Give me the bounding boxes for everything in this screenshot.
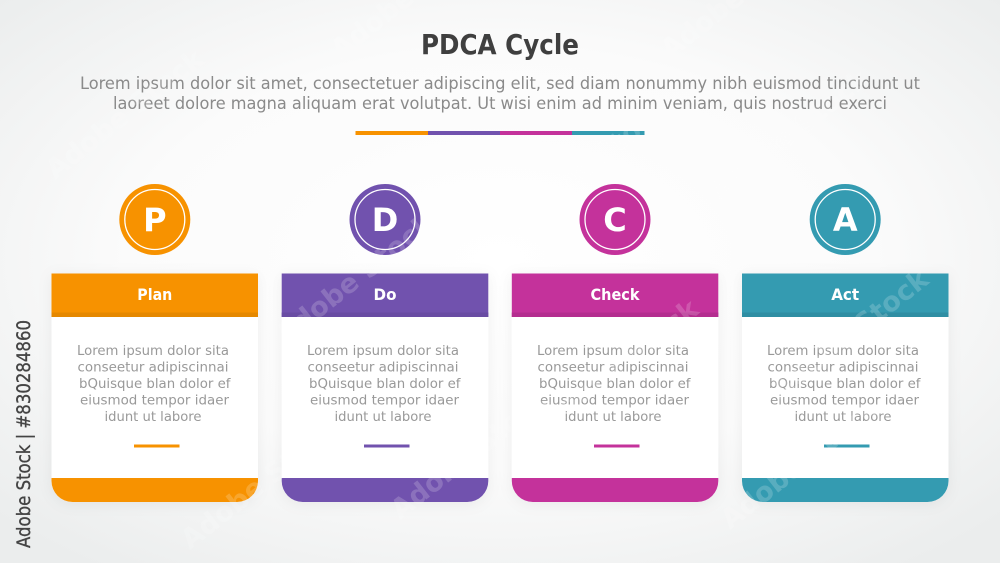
stock watermarks: Adobe Stock <box>270 208 440 351</box>
stock watermarks: Adobe Stock <box>535 293 705 436</box>
panel: Check <box>512 184 718 502</box>
footer band <box>52 478 258 502</box>
stock watermarks: Adobe Stock <box>715 393 885 536</box>
card text: Lorem ipsum dolor sita <box>77 343 229 359</box>
accent line <box>824 444 870 448</box>
stock watermarks: Adobe Stock <box>705 63 875 206</box>
four-colour title rule <box>356 131 644 135</box>
card text: conseetur adipiscinnai <box>768 360 918 376</box>
footer band <box>282 478 488 502</box>
card text: conseetur adipiscinnai <box>538 360 688 376</box>
accent line <box>134 444 180 448</box>
header: Check: Check <box>590 285 640 304</box>
card text <box>307 343 462 425</box>
accent line <box>364 444 410 448</box>
header: Plan: Plan <box>137 285 172 304</box>
card body <box>282 274 488 502</box>
card text <box>77 343 232 425</box>
card text: conseetur adipiscinnai <box>308 360 458 376</box>
card text: bQuisque blan dolor ef <box>769 376 922 392</box>
stock watermarks: Adobe Stock <box>385 383 555 526</box>
card text: bQuisque blan dolor ef <box>79 376 232 392</box>
card text: Lorem ipsum dolor sita <box>537 343 689 359</box>
icon: P badge <box>119 184 190 255</box>
card text: idunt ut labore <box>104 409 202 425</box>
description text: Lorem ipsum dolor sit amet, consectetuer adipiscing elit, sed diam nonummy nibh euismod tincidunt ut <box>80 74 921 93</box>
panel: Plan <box>52 184 258 502</box>
card text <box>767 343 922 425</box>
card body <box>512 274 718 502</box>
card text: eiusmod tempor idaer <box>770 392 919 408</box>
stock watermarks: Adobe Stock <box>40 43 210 186</box>
card text: eiusmod tempor idaer <box>540 392 689 408</box>
title: PDCA Cycle <box>421 28 579 61</box>
header: Act <box>742 274 948 317</box>
card text: idunt ut labore <box>564 409 662 425</box>
footer band <box>742 478 948 502</box>
footer band <box>512 478 718 502</box>
icon: A badge <box>810 184 881 255</box>
stock watermarks: Adobe Stock <box>175 413 345 556</box>
accent line <box>594 444 640 448</box>
stock watermarks: Adobe Stock <box>505 93 675 236</box>
card text: bQuisque blan dolor ef <box>539 376 692 392</box>
icon: C badge <box>580 184 650 255</box>
icon: A badge: A <box>833 201 858 239</box>
card text <box>537 343 692 425</box>
card text: Lorem ipsum dolor sita <box>307 343 459 359</box>
card body <box>742 274 948 502</box>
panel: Act <box>742 184 948 502</box>
header: Do: Do <box>374 285 396 304</box>
panel: Do <box>282 184 488 502</box>
card text: conseetur adipiscinnai <box>78 360 228 376</box>
description text: laoreet dolore magna aliquam erat volutpat. Ut wisi enim ad minim veniam, quis nostrud exerci <box>113 94 887 113</box>
header: Plan <box>52 274 258 317</box>
icon: P badge: P <box>143 201 167 239</box>
icon: D badge: D <box>372 201 398 239</box>
header: Check <box>512 274 718 317</box>
card text: idunt ut labore <box>794 409 892 425</box>
icon: D badge <box>350 184 420 255</box>
header: Do <box>282 274 488 317</box>
header: Act: Act <box>831 285 860 304</box>
icon: C badge: C <box>603 201 627 239</box>
stock watermarks: Adobe Stock <box>765 263 935 406</box>
card text: idunt ut labore <box>334 409 432 425</box>
card text: eiusmod tempor idaer <box>80 392 229 408</box>
vertical stock credit: Adobe Stock | #830284860 <box>13 320 35 548</box>
card body <box>52 274 258 502</box>
card text: bQuisque blan dolor ef <box>309 376 462 392</box>
card text: Lorem ipsum dolor sita <box>767 343 919 359</box>
description text <box>80 74 921 113</box>
card text: eiusmod tempor idaer <box>310 392 459 408</box>
